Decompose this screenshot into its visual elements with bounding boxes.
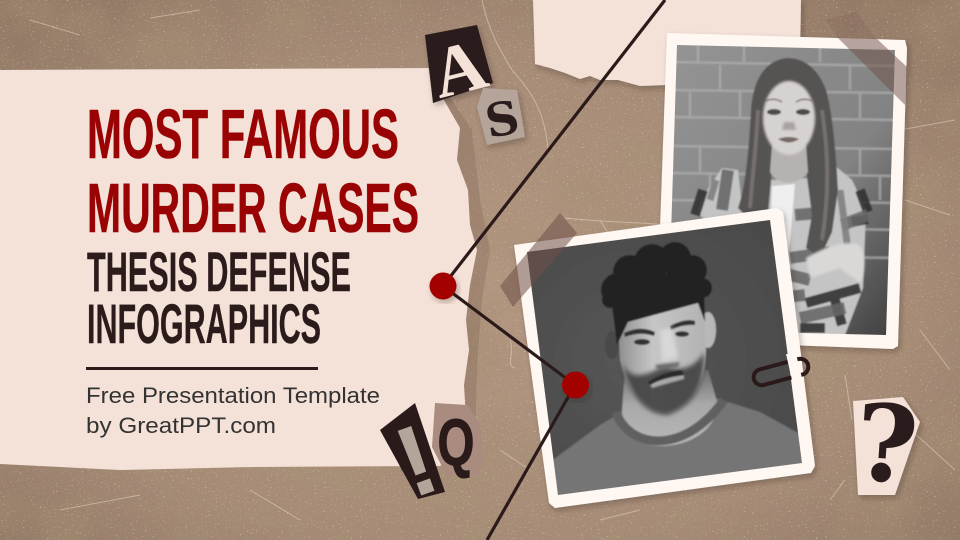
- presenter text: [86, 383, 380, 438]
- exclamation cutout: !: [382, 403, 451, 519]
- tape on woman photo: [826, 12, 907, 105]
- title: [87, 95, 419, 247]
- letter cutout Q: Q: [438, 406, 474, 480]
- letter cutout Q: [432, 403, 483, 480]
- ears: [606, 332, 618, 358]
- paperclip: [752, 354, 810, 387]
- letter cutout A: A: [424, 23, 495, 114]
- subtitle: [87, 240, 351, 355]
- photo: man with curly hair: [510, 208, 820, 510]
- tape on man photo: [500, 213, 577, 307]
- red pin two: [562, 372, 589, 398]
- subtitle: INFOGRAPHICS: [87, 292, 321, 355]
- eyes and brows: [624, 320, 695, 345]
- neck: [770, 145, 808, 183]
- undershirt: [770, 184, 796, 252]
- red pin one: [430, 272, 456, 300]
- connecting lines between pins: [443, 286, 575, 540]
- curly hair: [601, 242, 712, 345]
- letter cutout S: S: [481, 90, 523, 149]
- subtitle: THESIS DEFENSE: [87, 240, 351, 303]
- shirt: [697, 160, 866, 335]
- panel: torn paper top: [533, 0, 801, 86]
- t-shirt: [554, 398, 802, 495]
- face: [763, 81, 815, 155]
- face: [618, 302, 707, 395]
- neck: [622, 370, 718, 446]
- title: MURDER CASES: [87, 169, 419, 247]
- folded arm and hand: [806, 243, 864, 283]
- presenter text: Free Presentation Template: [86, 383, 380, 408]
- connecting line from top to first pin: [443, 0, 665, 286]
- question mark cutout: ?: [851, 379, 922, 508]
- beard: [622, 352, 704, 415]
- title: MOST FAMOUS: [87, 95, 399, 173]
- nose: [660, 328, 678, 362]
- photo: woman against brick wall: [656, 33, 907, 349]
- presenter text: by GreatPPT.com: [86, 413, 276, 438]
- hair: [738, 58, 838, 258]
- panel: torn paper title background: [0, 68, 490, 472]
- divider: [86, 367, 318, 370]
- collar: [616, 400, 724, 441]
